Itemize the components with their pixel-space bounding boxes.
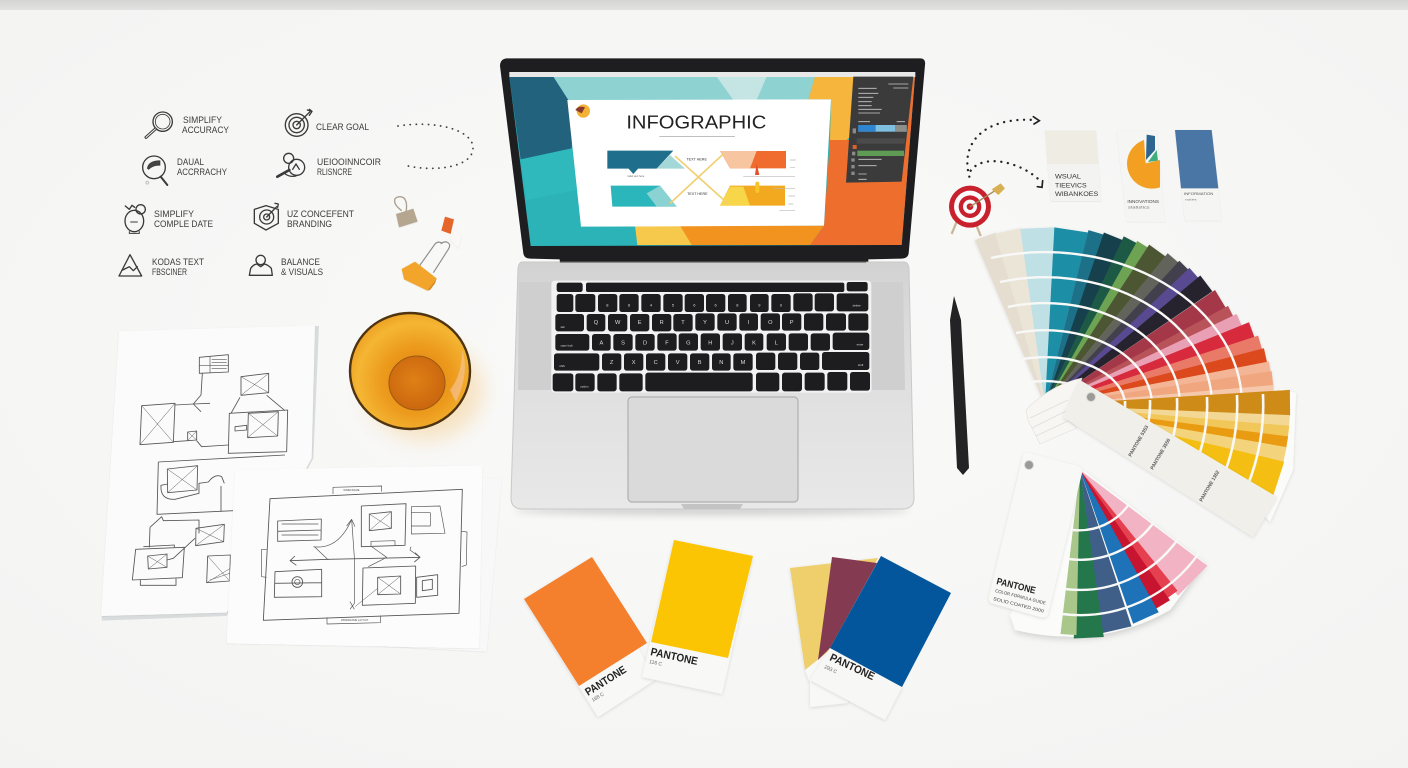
icon list drawn at 3x [119,109,312,276]
stylus pen [950,296,969,475]
card: visual: WSUAL [1055,174,1081,181]
key legends: X [632,360,636,366]
icon: mountain triangle [119,255,142,276]
card: blue swatch: INFORMATION [1184,191,1213,196]
icon: bullseye target [949,183,1005,236]
key legends: V [676,360,680,366]
key legends: Y [703,320,707,326]
card: visual [1045,131,1101,201]
key legends: caps lock [560,344,573,348]
card: blue swatch [1175,130,1222,221]
icon: person [249,255,272,275]
key legends: L [775,341,778,347]
card: visual: WIBANKOES [1055,191,1099,198]
text labels: UEIOOINNCOIR [317,157,381,168]
small fan cover card [989,453,1082,618]
key legends: I [748,320,750,326]
card: pie chart: INNOVATIONS [1127,199,1159,204]
text labels: & VISUALS [281,267,323,278]
yellow fan outer edge [1250,388,1296,522]
key legends: R [660,320,664,326]
paper: lower wireframe sheet: WIREFRAME [343,488,360,492]
icon: branding shield [254,203,278,230]
key legends: E [638,320,642,326]
small orange clip [441,217,462,248]
key legends: 5 [672,303,675,308]
arrow: dotted lower [971,161,1043,187]
key legends: K [752,341,756,347]
hinge [559,258,867,263]
fan band separators [991,252,1242,405]
key legends: F [665,341,669,347]
key legends: option [580,384,589,388]
paper: upper wireframe sheet [101,325,319,621]
fan handle card: PANTONE 3550 [1150,438,1172,471]
small fan cover card: SOLID COATED 2000 [993,596,1045,614]
wireframe sketch papers [101,325,502,652]
fan blades [975,227,1274,414]
slide title: INFOGRAPHIC [626,112,766,133]
laptop screen [500,58,925,262]
yellow band separators [1119,394,1263,487]
slide chart: label text here [628,174,645,178]
key legends: enter [857,342,863,346]
keyboard [551,281,871,393]
small fan blades [1061,455,1207,639]
fan handle card: PANTONE 5353 [1128,425,1150,458]
text labels: UZ CONCEFENT [287,209,354,220]
key legends: 8 [736,303,739,308]
small color fan deck [989,453,1207,639]
icon: clock figure [125,205,145,233]
menu bar [509,72,915,77]
maroon card [818,557,877,660]
icon: magnifier accuracy [143,156,167,185]
slide [567,99,831,227]
text labels: FBSCINER [152,267,187,278]
sketch: top cluster [140,355,288,453]
text labels: ACCRRACHY [177,167,228,178]
icon: hand magnifier [277,153,305,177]
key legends: C [654,360,658,366]
target with dotted arrows and cards [949,117,1222,236]
key legends: J [731,341,734,347]
key legends: W [615,320,621,326]
top edge band [0,0,1408,10]
key legends: S [621,341,625,347]
amber glass bowl [350,313,483,440]
key legends: G [686,341,691,347]
text labels: BALANCE [281,257,320,268]
slide logo [575,104,590,118]
key legends: shift [858,363,864,367]
key legends: 4 [650,303,653,308]
bezel [500,58,925,262]
text labels: SIMPLIFY [154,209,195,220]
key legends: Z [610,360,614,366]
key legends: shift [559,364,565,368]
binder clips [395,197,462,291]
key legends: H [708,341,712,347]
laptop lip notch [681,504,743,509]
blue card [810,556,951,720]
sketch: lower cluster [132,455,285,585]
text labels: CLEAR GOAL [316,122,369,133]
key legends [559,303,864,388]
yellow blades [1039,386,1290,500]
swatch card: orange: 168 C [591,691,606,704]
key legends: 0 [780,303,783,308]
text labels: KODAS TEXT [152,257,204,268]
key legends: tab [561,325,565,329]
fan hub stack [1026,378,1082,444]
text labels: BRANDING [287,219,332,230]
key legends: O [768,320,773,326]
laptop [500,58,925,515]
small beige clip [395,197,418,227]
arrow: dotted curve left [398,124,473,168]
title divider [659,135,735,137]
swatch card: yellow: PANTONE [649,646,699,668]
card: pie chart [1117,131,1165,222]
fan handle card: PANTONE 1362 [1199,470,1221,503]
blue card: PANTONE [828,652,876,683]
pale yellow card [790,558,878,707]
key legends: P [790,320,794,326]
text labels: DAUAL [177,157,204,168]
key legends: U [725,320,729,326]
paper: lower wireframe sheet [227,465,502,652]
large color fan deck [975,227,1296,537]
key legends: N [719,360,723,366]
key legends: Q [594,320,599,326]
small fan cover card: PANTONE [995,576,1037,597]
blue card: 293 C [823,664,838,676]
swatch card: orange: PANTONE [583,664,629,699]
key legends: D [643,341,647,347]
small fan cover card: COLOR FORMULA GUIDE [995,588,1046,606]
speaker panels [518,282,905,390]
card: visual: TIEEVICS [1055,182,1087,189]
small fan separators [1062,504,1199,615]
large orange binder clip [402,242,450,291]
key legends: 8 [606,303,609,308]
card: blue swatch: notes [1185,198,1197,202]
slide chart [607,151,796,211]
key legends: A [599,341,603,347]
key legends: M [741,360,746,366]
text labels [152,115,381,278]
paper: lower wireframe sheet: WIREFRAME LAYOUT [341,618,369,622]
laptop base deck [511,262,914,509]
text labels: RLISNCRE [317,167,352,178]
editor side panel [846,77,913,183]
swatch group: pale yellow, maroon, blue [790,556,951,720]
slide chart: TEXT HERE [686,158,707,162]
laptop shadow [514,505,910,515]
key legends: delete [853,304,861,308]
fan handle card [1063,380,1277,537]
small fan backing [1010,470,1205,637]
icon: target goal [285,109,312,136]
text labels: COMPLE DATE [154,219,213,230]
swatch card: yellow [642,540,753,694]
swatch card: yellow: 116 C [649,659,663,668]
text labels: ACCURACY [182,125,230,136]
key legends: 8 [628,303,631,308]
key legends: T [681,320,685,326]
key legends: B [698,360,702,366]
key legends: 6 [715,303,718,308]
swatch card: orange [524,557,655,717]
icon: magnifier simplify [146,112,172,137]
arrow: dotted upper [967,117,1039,177]
key legends: 6 [693,303,696,308]
slide chart: TEXT HERE [687,192,708,196]
panel: design principle icons [119,109,381,278]
trackpad [628,397,798,502]
key legends: 9 [758,303,761,308]
label: simplify accuracy: SIMPLIFY [183,115,223,126]
wallpaper shapes [509,77,915,246]
card: pie chart: statistics [1128,206,1150,210]
